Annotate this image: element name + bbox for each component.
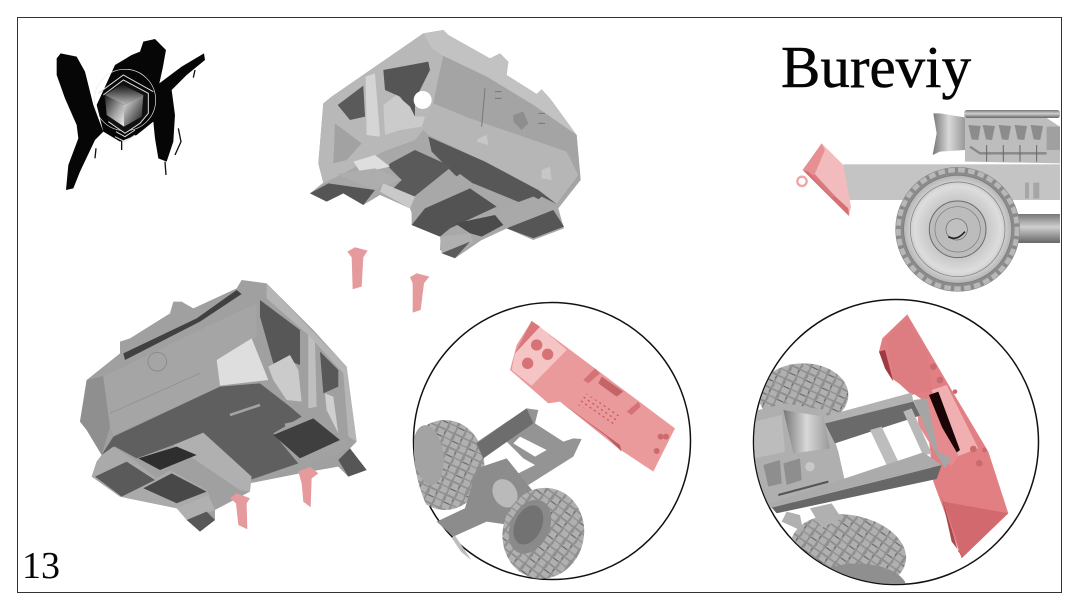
right tyre bbox=[502, 488, 584, 579]
chassis rails bbox=[825, 401, 920, 443]
upper tyre bbox=[760, 363, 848, 416]
lower hull render bbox=[80, 280, 367, 532]
chassis rail bbox=[843, 164, 1060, 200]
exhaust pipe bbox=[1013, 214, 1060, 243]
lower tyre bbox=[792, 514, 906, 584]
page number: 13 bbox=[22, 545, 60, 587]
logo: brush lettering with cube bbox=[57, 39, 205, 190]
peg two bbox=[410, 273, 429, 313]
engine bbox=[752, 403, 845, 508]
axle bbox=[437, 458, 540, 537]
side view: engine and wheel bbox=[797, 110, 1060, 292]
pink pegs above lower hull bbox=[347, 247, 429, 313]
upper hull render bbox=[310, 30, 581, 258]
pink tow bracket bbox=[803, 143, 851, 216]
pink beam bbox=[510, 321, 675, 472]
pink bumper bbox=[879, 314, 1008, 558]
peg four bbox=[298, 467, 318, 507]
title: Bureviy bbox=[781, 34, 972, 100]
wheel bbox=[895, 167, 1020, 292]
left tyre bbox=[414, 420, 484, 510]
rail marks bbox=[1025, 183, 1039, 199]
suspension parts bbox=[782, 503, 842, 532]
peg three bbox=[230, 493, 250, 529]
peg one bbox=[347, 247, 368, 289]
detail circle: rear bumper block bbox=[406, 302, 690, 586]
engine block bbox=[965, 118, 1060, 163]
tow frame bbox=[475, 408, 582, 485]
detail circle: fitted bumper bbox=[752, 300, 1038, 598]
